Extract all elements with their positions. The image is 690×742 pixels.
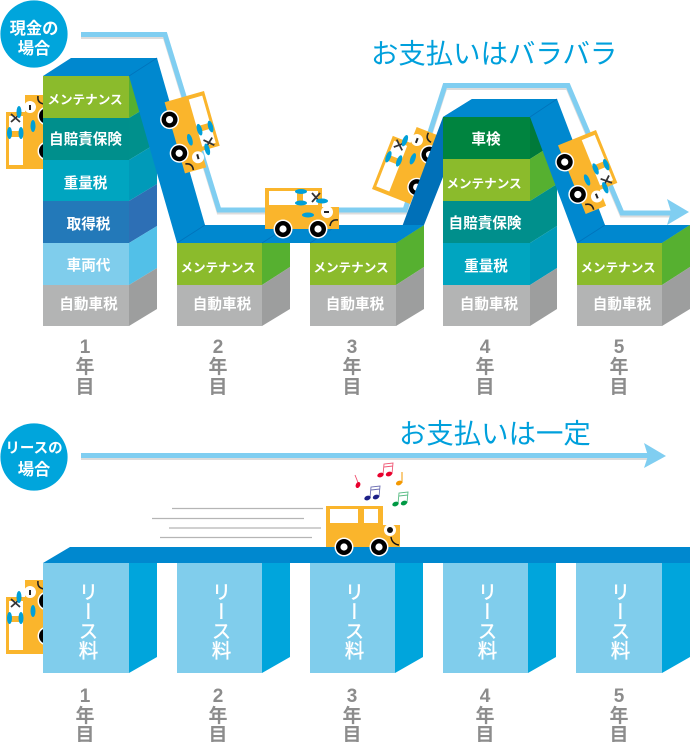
year labels: lease: 年	[342, 704, 362, 727]
happy car	[326, 506, 400, 556]
year labels: lease: 年	[75, 704, 95, 727]
year labels: lease: 5	[614, 686, 625, 707]
column: year 4: 自動車税	[460, 295, 519, 313]
column: year 3: メンテナンス	[313, 261, 389, 275]
lease column 5	[576, 563, 690, 673]
speed lines	[152, 508, 323, 538]
year labels: lease: 年	[609, 704, 629, 727]
car descending from year 1	[155, 91, 224, 176]
column: year 2	[177, 225, 290, 326]
year labels: cash: 年	[475, 355, 495, 378]
year labels: cash: 3	[347, 337, 357, 358]
badge: lease: 場合	[18, 461, 51, 479]
lease column 1: リース料	[75, 582, 98, 660]
lease column 2: リース料	[208, 582, 231, 660]
year labels: lease: 年	[208, 704, 228, 727]
year labels: cash	[75, 337, 629, 398]
year labels: lease: 2	[213, 686, 223, 707]
car behind column 1	[6, 95, 56, 169]
year labels: cash: 年	[75, 355, 95, 378]
column: year 4: 車検	[471, 131, 501, 148]
lease column 4: リース料	[474, 582, 497, 660]
road: cash route	[129, 58, 690, 243]
column: year 4: 自賠責保険	[449, 214, 522, 232]
column: year 4: 重量税	[464, 258, 508, 275]
badge: cash: 現金の	[10, 19, 58, 38]
lease column 5: リース料	[607, 582, 630, 660]
lease column 3	[310, 563, 423, 673]
year labels: cash: 年	[208, 355, 228, 378]
column: year 1	[43, 58, 157, 326]
cash path line	[81, 34, 689, 225]
badge: cash	[0, 0, 68, 68]
lease column 1	[43, 563, 157, 673]
badge: lease: リースの	[5, 441, 63, 457]
column: year 4	[443, 99, 557, 326]
lease arrow	[81, 443, 666, 468]
year labels: lease: 3	[347, 686, 357, 707]
column: year 5: メンテナンス	[580, 261, 656, 275]
column: year 1: 自賠責保険	[49, 130, 122, 148]
music notes	[355, 463, 408, 507]
column: year 1: 重量税	[64, 175, 108, 192]
year labels: cash: 目	[609, 377, 629, 398]
column: year 1: 取得税	[67, 216, 111, 233]
lease column 4	[443, 563, 556, 673]
lease road top	[43, 547, 690, 563]
column: year 5: 自動車税	[593, 295, 652, 313]
ramp up to year 4	[396, 99, 472, 243]
column: year 3	[310, 225, 424, 326]
column: year 1: メンテナンス	[47, 93, 123, 107]
lease column 2	[177, 563, 290, 673]
column: year 3: 自動車税	[326, 295, 385, 313]
column: year 2: 自動車税	[193, 295, 252, 313]
badge: lease	[0, 423, 68, 491]
year labels: cash: 4	[480, 337, 491, 358]
year labels: cash: 目	[75, 377, 95, 398]
year labels: cash: 年	[609, 355, 629, 378]
badge: cash: 場合	[18, 40, 51, 58]
year labels: lease: 1	[80, 686, 91, 707]
title: cash: お支払いはバラバラ	[371, 38, 617, 69]
car climbing ramp to year 4	[372, 120, 446, 207]
car on flat road	[265, 188, 339, 238]
column: year 1: 自動車税	[59, 295, 118, 313]
year labels: cash: 目	[208, 377, 228, 398]
year labels: cash: 目	[342, 377, 362, 398]
year labels: lease	[75, 686, 629, 742]
year labels: lease: 年	[475, 704, 495, 727]
year labels: lease: 4	[480, 686, 491, 707]
column: year 4: メンテナンス	[446, 177, 522, 191]
column: year 5	[577, 225, 690, 326]
car behind lease column 1	[6, 580, 56, 654]
column: year 1: 車両代	[67, 257, 111, 274]
lease column 3: リース料	[341, 582, 364, 660]
year labels: cash: 2	[213, 337, 223, 358]
year labels: cash: 1	[80, 337, 91, 358]
year labels: cash: 目	[475, 377, 495, 398]
title: lease: お支払いは一定	[399, 418, 591, 449]
column: year 2: メンテナンス	[180, 261, 256, 275]
year labels: cash: 5	[614, 337, 625, 358]
year labels: cash: 年	[342, 355, 362, 378]
car descending from year 4	[549, 130, 624, 218]
